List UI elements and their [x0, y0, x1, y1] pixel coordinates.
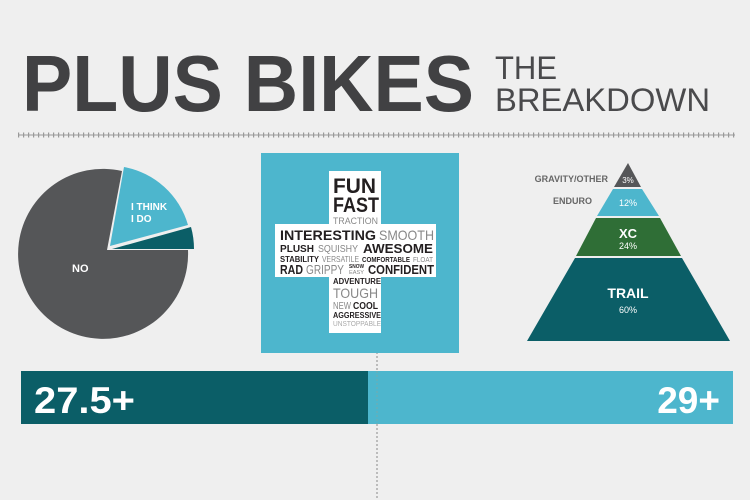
slice: yes: [112, 227, 194, 249]
subtitle: [495, 50, 710, 118]
pie chart: I THINK: [131, 202, 168, 213]
panel: word cross: COMFORTABLE: [362, 257, 410, 264]
slice: I think I do: [110, 167, 188, 246]
panel: word cross: TRACTION: [333, 216, 378, 226]
pyramid chart: TRAIL: [607, 285, 649, 301]
panel: word cross: RAD: [280, 262, 303, 277]
dotted center line: [376, 352, 378, 500]
panel: word cross: TOUGH: [333, 285, 378, 301]
panel: word cross: NEW: [333, 301, 351, 312]
pyramid chart: 24%: [619, 241, 637, 251]
bar: wheel sizes: 29+: [657, 380, 720, 421]
panel: word cross: SQUISHY: [318, 244, 358, 255]
panel: word cross: COOL: [353, 301, 378, 312]
pyramid chart: [527, 163, 730, 341]
panel: word cross: EASY: [349, 270, 365, 276]
panel: word cross: CONFIDENT: [368, 262, 434, 277]
subtitle: THE: [495, 50, 557, 86]
panel: word cross: UNSTOPPABLE: [333, 321, 381, 328]
pyramid chart: 12%: [619, 198, 637, 208]
pyramid chart: GRAVITY/OTHER: [535, 174, 608, 184]
panel: word cross: INTERESTING: [280, 227, 376, 243]
panel: word cross: [261, 153, 459, 353]
panel: word cross: VERSATILE: [322, 255, 359, 264]
panel: word cross: STABILITY: [280, 255, 320, 264]
panel: word cross: GRIPPY: [306, 262, 344, 277]
title: PLUS BIKES: [22, 39, 474, 128]
pie chart: I DO: [131, 214, 152, 225]
panel: word cross: AWESOME: [363, 241, 433, 256]
pyramid chart: XC: [619, 226, 638, 241]
panel: word cross: FAST: [333, 194, 379, 217]
panel: word cross: AGGRESSIVE: [333, 311, 382, 320]
pyramid chart: 3%: [622, 176, 634, 185]
panel: word cross: FUN: [333, 175, 376, 198]
panel: word cross: SMOOTH: [379, 227, 434, 243]
bar: wheel sizes: [21, 371, 733, 424]
title: [22, 39, 710, 128]
panel: word cross: FLOAT: [413, 257, 434, 264]
pyramid chart: ENDURO: [553, 196, 592, 206]
panel: word cross: SNOW: [349, 264, 364, 270]
bar: wheel sizes: 27.5+: [34, 380, 135, 421]
subtitle: BREAKDOWN: [495, 82, 710, 118]
pie chart: [18, 167, 194, 339]
pie chart: NO: [72, 263, 89, 275]
panel: word cross: PLUSH: [280, 244, 314, 255]
pyramid chart: 60%: [619, 305, 637, 315]
panel: word cross: ADVENTURE: [333, 277, 382, 286]
